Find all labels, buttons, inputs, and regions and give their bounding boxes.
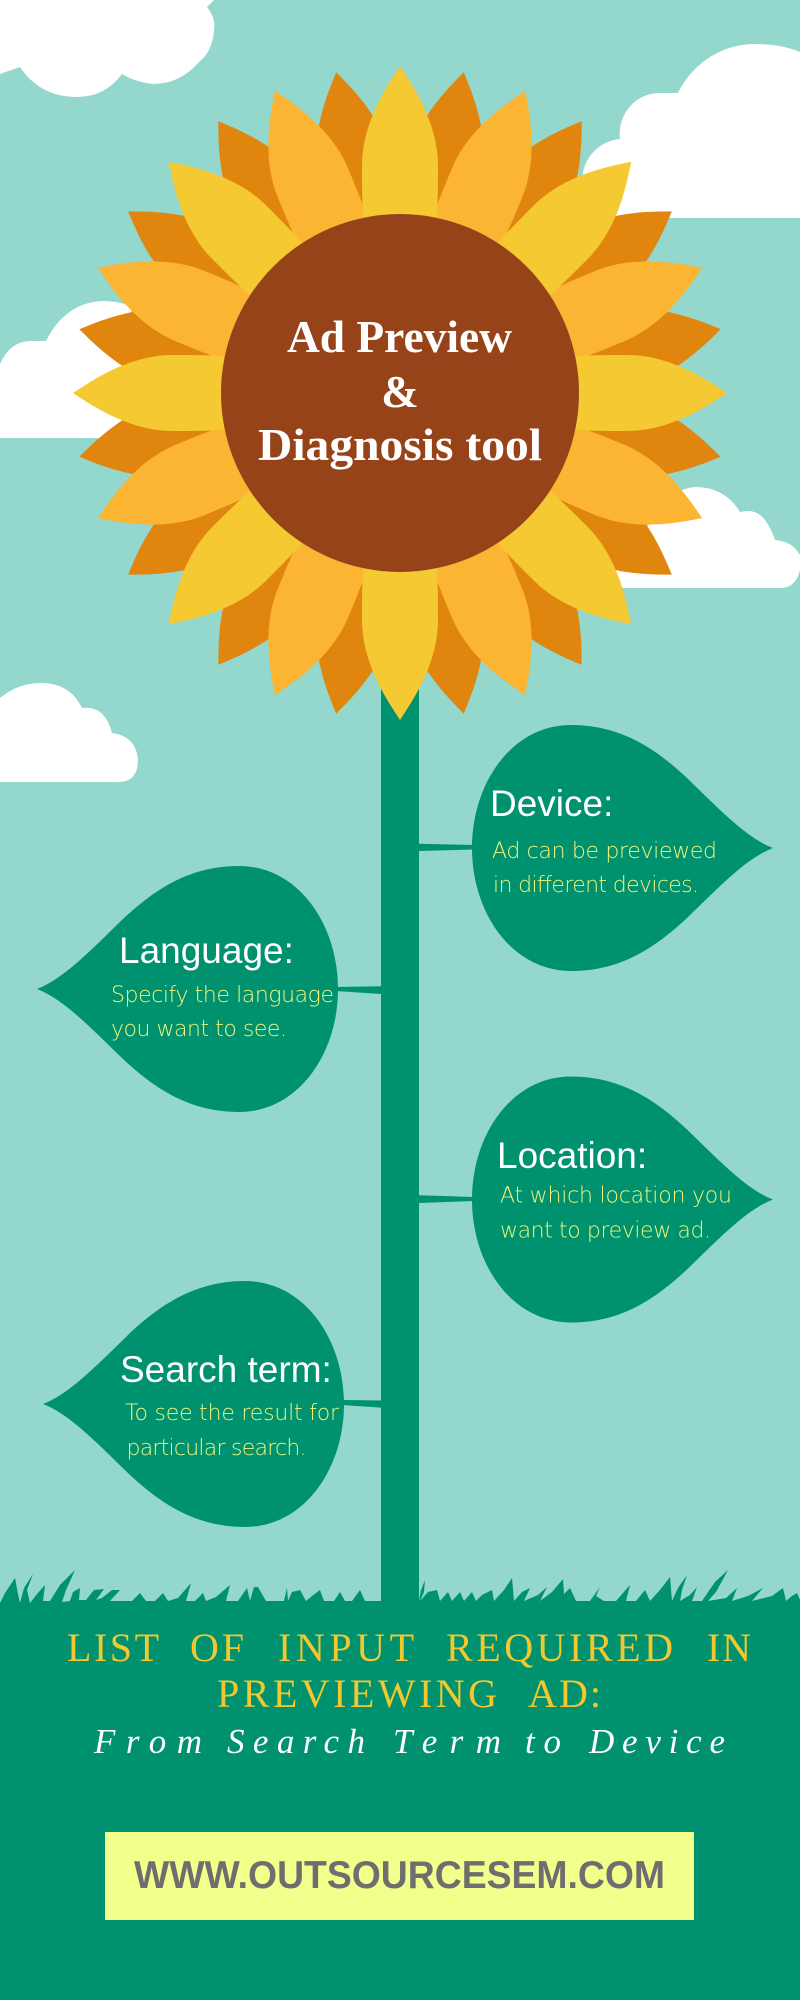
subheading: Term [393,1722,501,1761]
cloud: lower left [0,683,138,782]
headline: AD: [528,1671,601,1716]
leaf text: you want to see. [111,1017,287,1042]
cloud: middle right [600,487,800,588]
leaf text: particular search. [126,1436,306,1461]
yellow petals [73,66,727,720]
grass and ground [0,1570,800,2000]
leaf branch [419,844,474,851]
title: Ad Preview [287,312,513,362]
leaf text: Specify the language [111,983,334,1008]
flower [72,65,728,721]
leaf shape [37,866,338,1112]
flower centre disc [221,214,579,572]
title: & [381,367,419,417]
leaf heading: Search term: [120,1349,332,1390]
headline: PREVIEWING [217,1671,497,1716]
leaf text [500,1184,732,1244]
leaf shape [472,1076,773,1322]
leaf heading: Location: [497,1135,647,1176]
leaf text: To see the result for [125,1401,340,1426]
stem [381,650,419,1610]
cloud: middle left [0,301,160,438]
leaf heading: Device: [490,783,613,824]
leaf text: want to preview ad. [500,1218,711,1244]
leaf text [492,839,717,898]
subheading: Search [227,1722,365,1761]
subheading [93,1722,725,1761]
leaf branch [336,986,381,994]
headline: LIST [67,1625,159,1670]
subheading: to [525,1722,561,1761]
leaf shape [43,1281,344,1527]
leaf branch [342,1400,381,1408]
headline [67,1625,751,1716]
leaf text: At which location you [500,1184,732,1208]
website box [105,1832,694,1920]
headline: OF [190,1625,244,1670]
leaf branch [419,1195,474,1203]
subheading: Device [588,1722,725,1761]
leaf text: Ad can be previewed [492,839,717,864]
dark orange petals [72,65,728,721]
headline: IN [707,1625,751,1670]
leaf: location [419,1076,773,1322]
leaf text [125,1401,340,1461]
title [258,312,542,470]
headline: REQUIRED [446,1625,673,1670]
leaf: language [37,866,381,1112]
subheading: From [93,1722,202,1761]
website url: WWW.OUTSOURCESEM.COM [134,1854,665,1897]
leaf heading: Language: [119,930,294,971]
cloud: top left [0,0,214,97]
cloud: top right [583,44,800,218]
title: Diagnosis tool [258,420,542,470]
yellow box [105,1832,694,1920]
light orange petals [83,76,717,710]
headline: INPUT [278,1625,414,1670]
leaf: search term [43,1281,381,1527]
leaf text [111,983,334,1042]
leaf: device [419,725,773,971]
leaf shape [472,725,773,971]
leaf text: in different devices. [493,873,699,898]
